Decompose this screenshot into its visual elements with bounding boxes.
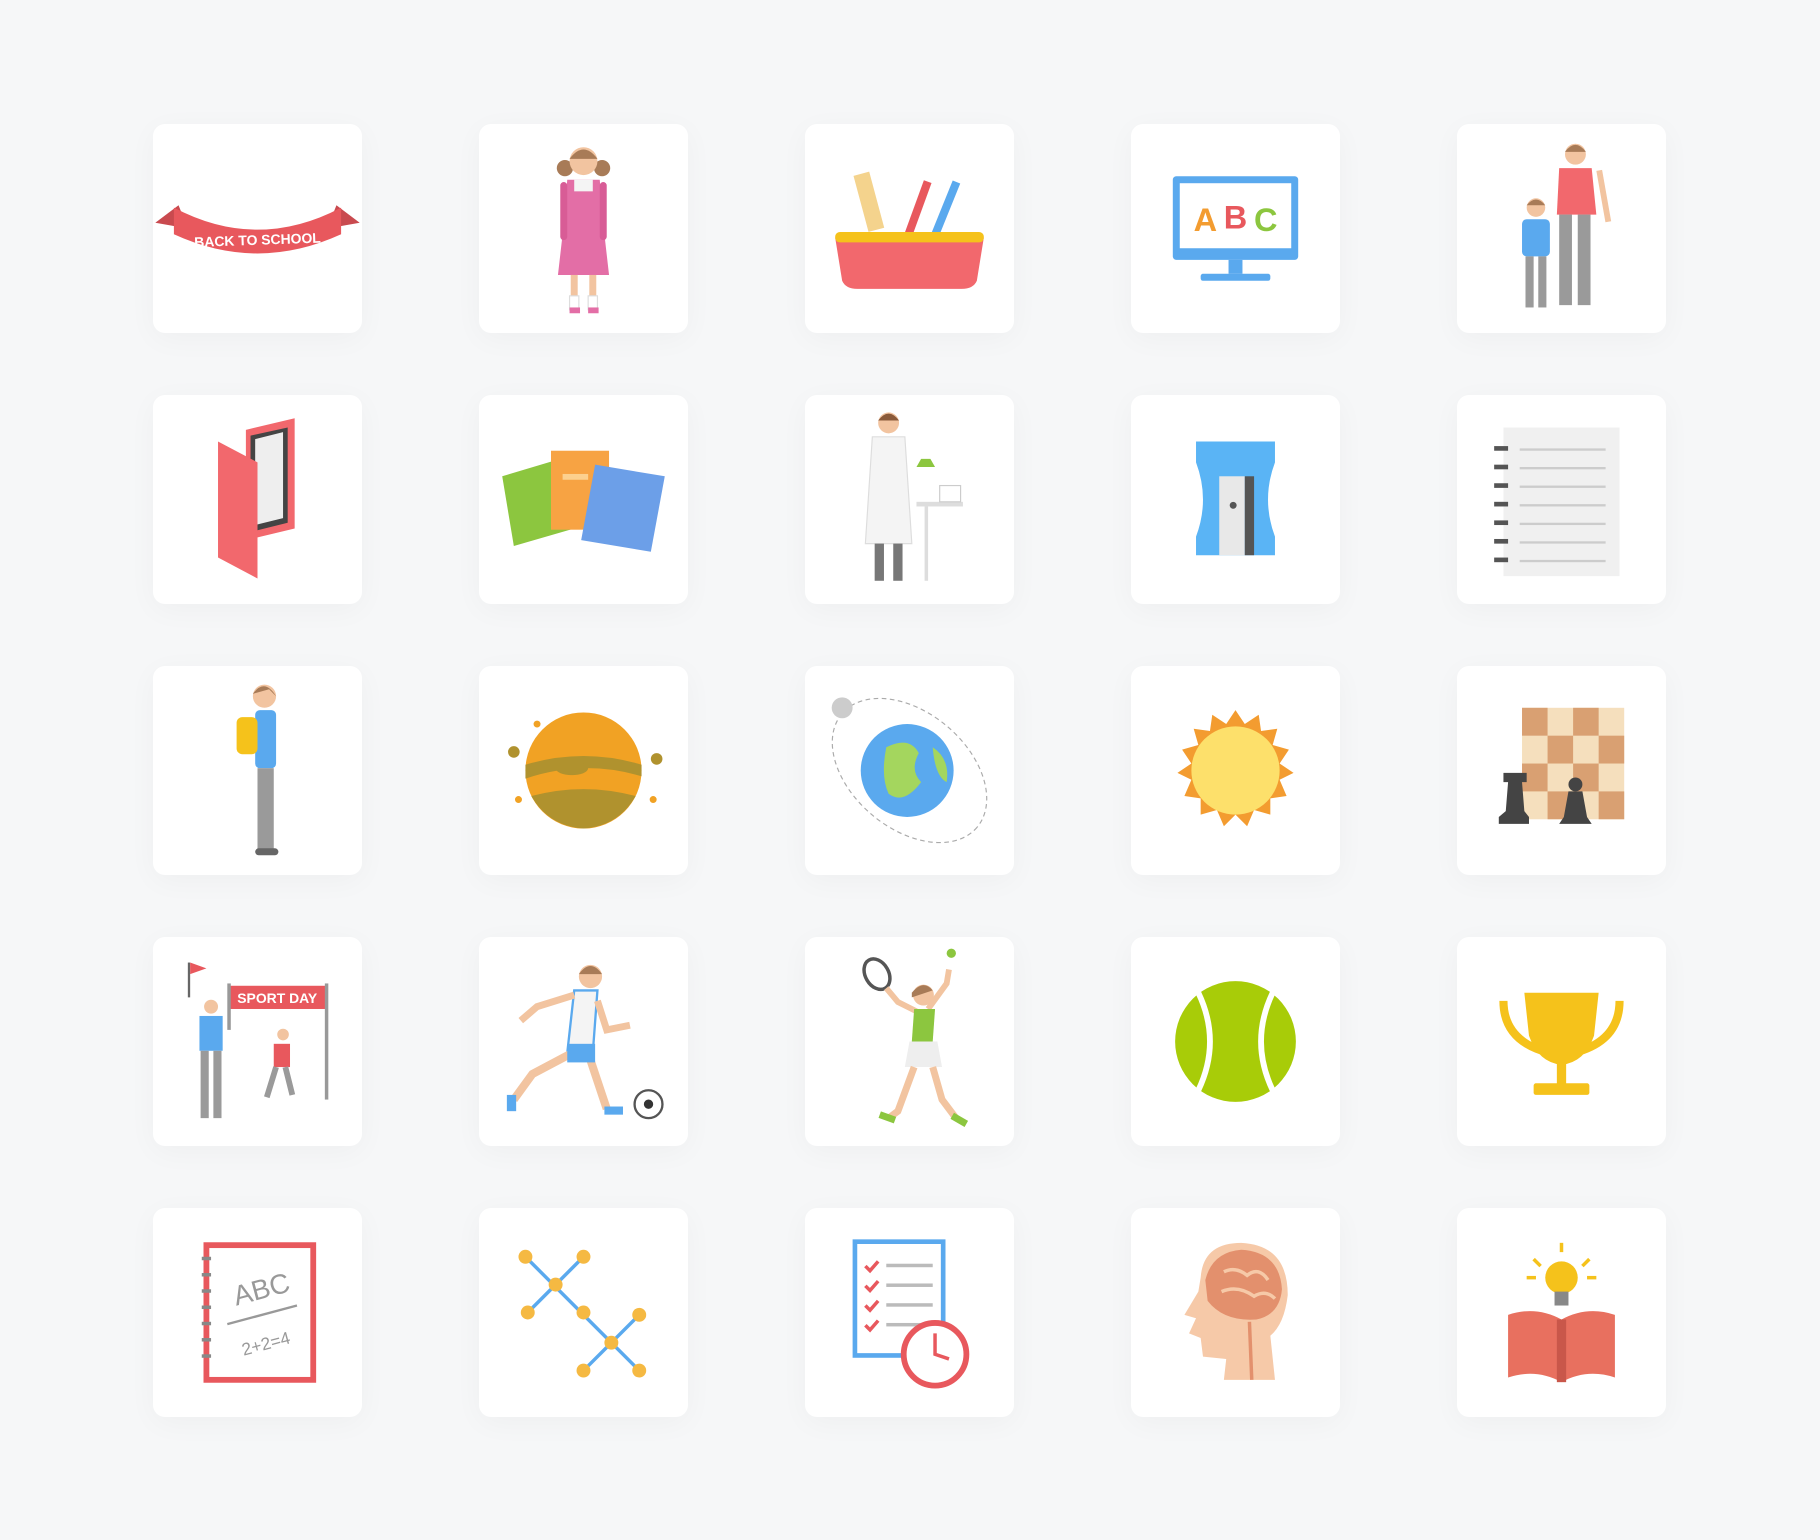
icon: chess <box>1499 708 1624 824</box>
icon: paper <box>1494 428 1620 576</box>
card: tennis ball <box>1131 937 1340 1146</box>
icon: brain head <box>1184 1243 1288 1380</box>
icon: checklist clock <box>855 1242 966 1386</box>
icon: earth orbit <box>805 669 1014 872</box>
icon: tennis player <box>859 949 968 1127</box>
icon: sun <box>1177 710 1294 826</box>
card: ABC monitor <box>1131 124 1340 333</box>
card: planet <box>479 666 688 875</box>
card: books <box>479 395 688 604</box>
icon: banner: BACK TO SCHOOL <box>194 230 322 250</box>
icon: books <box>502 451 665 552</box>
icon: book and bulb <box>1508 1243 1615 1382</box>
card: tennis player <box>805 937 1014 1146</box>
icon: tennis ball <box>1175 981 1296 1102</box>
icon: trophy <box>1503 993 1620 1095</box>
icon: molecule <box>518 1250 646 1378</box>
card: trophy <box>1457 937 1666 1146</box>
card: sun <box>1131 666 1340 875</box>
icon: girl <box>557 147 610 313</box>
icon: ABC notebook <box>202 1245 313 1380</box>
card: earth and moon orbit <box>805 666 1014 875</box>
icon: monitor: A <box>1194 202 1217 238</box>
icon: scientist <box>865 412 963 581</box>
icon: sport day: SPORT DAY <box>237 990 318 1006</box>
icon: monitor <box>1173 176 1298 281</box>
card: scientist <box>805 395 1014 604</box>
card: boy with backpack <box>153 666 362 875</box>
icon: pencil case <box>835 172 984 289</box>
card: molecule <box>479 1208 688 1417</box>
icon: sport day <box>188 963 328 1118</box>
icon: sharpener <box>1196 441 1275 555</box>
icon: ABC notebook: ABC <box>230 1267 293 1312</box>
card: back to school banner <box>153 124 362 333</box>
icon: monitor: C <box>1254 202 1277 238</box>
card: sport day <box>153 937 362 1146</box>
card: book with light bulb <box>1457 1208 1666 1417</box>
card: soccer player <box>479 937 688 1146</box>
card: checklist with clock <box>805 1208 1014 1417</box>
card: paper sheet <box>1457 395 1666 604</box>
card: ABC notebook <box>153 1208 362 1417</box>
card: father and son <box>1457 124 1666 333</box>
icon: planet <box>508 712 662 829</box>
icon: folder <box>218 418 295 578</box>
card: red folder <box>153 395 362 604</box>
icon: monitor: B <box>1224 200 1247 236</box>
card: chess <box>1457 666 1666 875</box>
icon: father and son <box>1522 144 1611 307</box>
card: brain head <box>1131 1208 1340 1417</box>
icon: banner <box>155 205 360 253</box>
icon: boy <box>237 685 278 855</box>
icon: ABC notebook: 2+2=4 <box>239 1327 293 1360</box>
card: pencil case <box>805 124 1014 333</box>
card: sharpener <box>1131 395 1340 604</box>
card: schoolgirl <box>479 124 688 333</box>
icon: soccer <box>507 965 662 1118</box>
